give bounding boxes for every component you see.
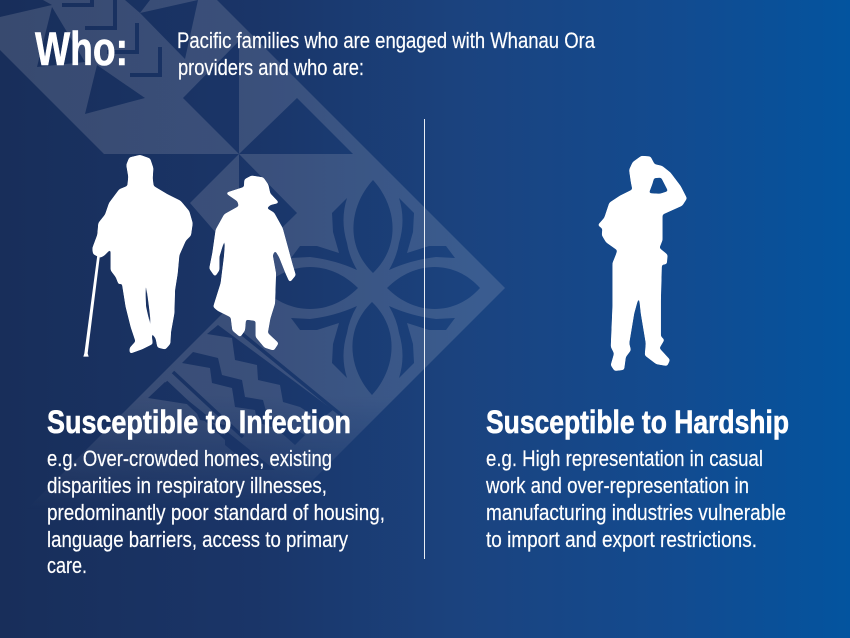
intro text: Pacific families who are engaged with Whanau Ora [177, 28, 596, 53]
panel: susceptible to infection [47, 404, 385, 578]
text block: hardship examples [485, 446, 786, 552]
heading: infection: Susceptible to Infection [47, 404, 351, 440]
intro text [177, 28, 596, 80]
text block: hardship examples: e.g. High representation in casual [486, 446, 763, 471]
icon: worker saluting silhouette [599, 157, 686, 370]
panel: susceptible to hardship [485, 404, 789, 552]
title: Who: Who: [35, 22, 128, 75]
heading: hardship: Susceptible to Hardship [486, 404, 789, 440]
text block: infection examples [47, 446, 385, 578]
text block: hardship examples: to import and export restrictions. [486, 527, 757, 552]
text block: infection examples: care. [47, 553, 87, 578]
text block: hardship examples: work and over-representation in [485, 473, 749, 498]
vertical divider [424, 119, 425, 559]
text block: infection examples: disparities in respiratory illnesses, [47, 473, 327, 498]
text block: hardship examples: manufacturing industries vulnerable [486, 500, 786, 525]
intro text: providers and who are: [178, 55, 364, 80]
text block: infection examples: e.g. Over-crowded homes, existing [47, 446, 332, 471]
text block: infection examples: language barriers, access to primary [47, 527, 348, 552]
decorative Pacific pattern [0, 0, 505, 482]
text block: infection examples: predominantly poor standard of housing, [47, 500, 385, 525]
icon: elderly woman with hat silhouette [210, 177, 295, 349]
icon: elderly man with cane silhouette [83, 156, 192, 357]
